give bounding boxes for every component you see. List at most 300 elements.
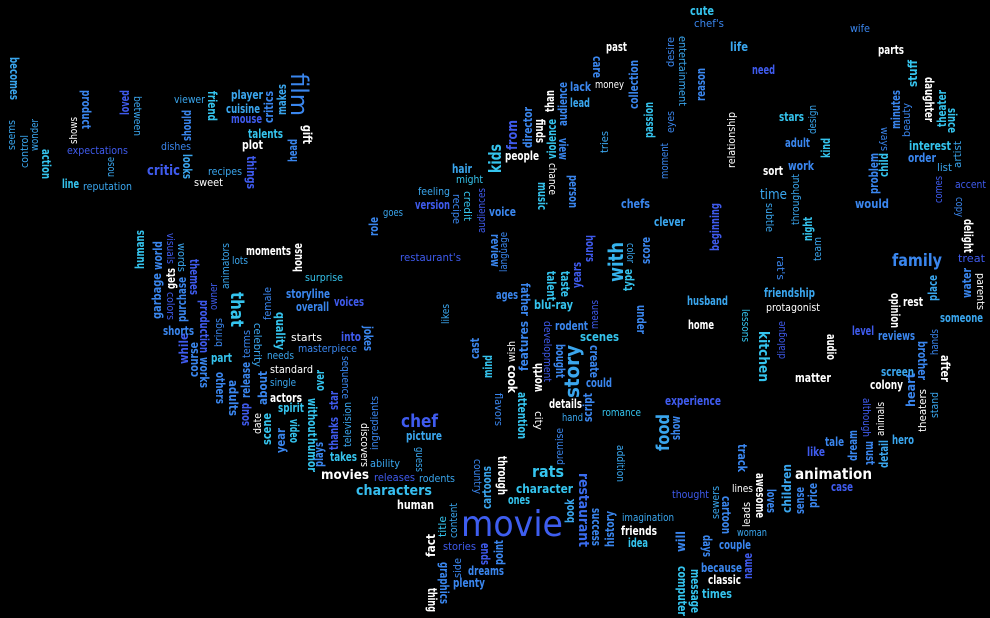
word cluster: top center: violence <box>545 119 559 159</box>
word cluster: top center: cute <box>690 4 714 18</box>
word cluster: left lower wing: standard <box>270 364 313 376</box>
word cluster: center: scenes <box>580 330 619 344</box>
word: movies: movies <box>321 468 369 483</box>
word cluster: bottom center: stories <box>443 541 476 553</box>
word cluster: upper left: between <box>131 96 143 136</box>
word: story: story <box>560 345 584 398</box>
word cluster: lower right: colony <box>870 378 903 392</box>
word cluster: lower right: animals <box>875 402 887 436</box>
word cluster: center: hours <box>583 235 597 262</box>
word cluster: lower right: parents <box>974 273 986 310</box>
word cluster: left lower wing: actors <box>270 391 302 405</box>
word cluster: top center: director <box>521 107 535 148</box>
word cluster: bottom center: guess <box>413 447 425 472</box>
word cluster: left lower wing: discovers <box>358 423 370 467</box>
word cluster: upper right: interest <box>909 139 951 153</box>
word cluster: left lower wing: over <box>313 370 327 391</box>
word cluster: left lower wing: year <box>274 428 288 453</box>
word cluster: upper right: comes <box>933 176 945 203</box>
word cluster: upper right: list <box>937 162 952 174</box>
word cluster: lower right: classic <box>708 573 741 587</box>
word cluster: upper left: critic <box>147 163 180 179</box>
word cluster: lower right: protagonist <box>766 302 820 314</box>
word cluster: bottom center: romance <box>602 407 641 419</box>
word cluster: left lower wing: quality <box>273 312 287 350</box>
word cluster: left lower wing: while <box>177 333 191 364</box>
word cluster: top center: beginning <box>708 203 722 251</box>
word cluster: upper right: minutes <box>889 90 903 129</box>
word cluster: top center: passion <box>642 102 656 138</box>
word cluster: center: color <box>624 243 636 264</box>
word cluster: left lower wing: adults <box>226 380 240 416</box>
word cluster: lower right: because <box>701 561 742 575</box>
word cluster: center: review <box>488 234 502 267</box>
word cluster: center: bought <box>553 344 567 378</box>
word cluster: center: wish <box>506 341 518 362</box>
word cluster: top center: voice <box>489 205 516 219</box>
word cluster: upper left: plot <box>242 138 263 152</box>
word cluster: bottom center: premise <box>554 428 566 465</box>
word cluster: center: years <box>570 262 584 288</box>
word cluster: bottom center: rats <box>532 462 564 481</box>
word cluster: upper left: looks <box>180 154 194 179</box>
word cluster: lower right: detail <box>877 440 891 468</box>
word cluster: left lower wing: voices <box>334 295 364 309</box>
word cluster: upper right: theater <box>935 90 949 127</box>
word cluster: top center: might <box>456 174 483 186</box>
word cluster: left lower wing: owner <box>208 282 220 310</box>
word cluster: top center: desire <box>665 37 677 67</box>
word cluster: lower right: rest <box>903 295 923 309</box>
word cluster: lower right: tale <box>825 435 844 449</box>
word cluster: left lower wing: overall <box>296 300 329 314</box>
word cluster: lower right: leads <box>741 502 753 527</box>
word cluster: bottom center: point <box>492 540 506 565</box>
word cluster: top center <box>367 4 783 251</box>
word: with: with <box>604 242 628 282</box>
word cluster: left lower wing: celebrity <box>251 323 263 367</box>
word cluster: lower right: show <box>669 416 683 440</box>
word cluster: lower right: lessons <box>739 309 751 342</box>
word cluster: top center: chef's <box>694 18 724 30</box>
word cluster: bottom center: releases <box>374 472 415 484</box>
word cluster: upper left: cuisine <box>226 102 260 116</box>
word cluster: upper right: beauty <box>901 103 913 137</box>
word cluster: upper right: copy <box>953 197 965 217</box>
word cluster: top center: people <box>505 149 539 163</box>
word cluster: center: language <box>498 232 510 272</box>
word cluster: top center: collection <box>627 60 641 109</box>
word cluster: upper left: gift <box>300 125 314 144</box>
word cluster: upper left: head <box>286 139 300 162</box>
word cluster: left lower wing: garbage <box>150 273 164 319</box>
word cluster: top center: chefs <box>621 197 650 211</box>
word cluster: left lower wing: scene <box>260 413 274 445</box>
word cluster: top center: finds <box>533 119 547 143</box>
word cluster: upper left: seems <box>6 120 18 150</box>
word cluster: left lower wing: course <box>187 342 201 377</box>
word cluster: top center: from <box>505 120 521 150</box>
word cluster: lower right: imagination <box>622 512 674 524</box>
word cluster: lower right: times <box>702 587 732 601</box>
word cluster: top center: lead <box>570 96 590 110</box>
word cluster: lower right: screen <box>881 365 914 379</box>
word cluster: upper right: team <box>812 237 824 261</box>
word cluster: left lower wing: date <box>252 413 264 434</box>
word cluster: top center: relationship <box>726 112 738 168</box>
word cluster: bottom center: rodents <box>419 473 455 485</box>
word cluster: upper right: design <box>807 105 819 134</box>
word: movie: movie <box>461 504 563 545</box>
word cluster: left lower wing: without <box>305 398 319 437</box>
word cluster: upper right: order <box>908 151 936 165</box>
word cluster: bottom center: fact <box>424 534 438 557</box>
word cluster: top center: than <box>543 90 557 112</box>
word cluster: lower right: cartoon <box>719 496 733 534</box>
word cluster: bottom center: title <box>437 516 449 537</box>
word: that: that <box>226 292 247 327</box>
word cluster: lower right: will <box>674 531 688 552</box>
word cluster: bottom center: history <box>603 511 617 547</box>
word cluster: upper left: makes <box>275 84 289 115</box>
word cluster: left lower wing: lots <box>232 255 248 267</box>
word cluster: left lower wing: sequence <box>339 356 351 399</box>
word cluster: bottom center: dreams <box>468 564 504 578</box>
word cluster: top center: moment <box>659 143 671 179</box>
word cluster: lower right: matter <box>795 371 831 385</box>
word cluster: top center: care <box>590 56 604 78</box>
word cluster: left lower wing: female <box>262 287 274 320</box>
word cluster: upper right <box>760 23 986 280</box>
word cluster: upper right: since <box>945 108 959 133</box>
word: animation: animation <box>795 465 872 483</box>
word cluster: center: cook <box>505 365 519 394</box>
word cluster: upper right: work <box>788 159 815 173</box>
word cluster: center: under <box>634 305 648 334</box>
word cluster: center: cast <box>468 338 482 359</box>
word cluster: lower right: thought <box>672 489 709 501</box>
word cluster: upper right: ways <box>878 127 890 151</box>
word cluster: lower right: addition <box>614 445 626 482</box>
word cluster: lower right: price <box>806 483 820 508</box>
word cluster: top center: lack <box>570 80 592 94</box>
word cluster: lower right: like <box>807 445 825 459</box>
word cluster: center: likes <box>440 304 452 324</box>
word cluster: lower right: sewers <box>710 486 722 519</box>
word cluster: upper right: throughout <box>790 174 802 225</box>
word cluster: lower right: level <box>852 324 874 338</box>
word cluster: upper right: parts <box>878 43 904 57</box>
word cluster: bottom center: picture <box>406 429 442 443</box>
word cluster: top center: kids <box>486 144 506 173</box>
word cluster: upper right: would <box>855 197 889 211</box>
word cluster: center: features <box>517 321 531 371</box>
word cluster: top center: sort <box>763 164 783 178</box>
word cluster: upper left: friend <box>205 91 219 121</box>
word cluster: upper right: stuff <box>906 60 920 87</box>
word cluster: top center: feeling <box>418 186 450 198</box>
word cluster: center: development <box>541 321 553 382</box>
word cluster: left lower wing: jokes <box>361 325 375 351</box>
word cluster: left lower wing: plays <box>312 442 326 467</box>
word cluster: center: father <box>518 283 532 316</box>
word cluster: top center: past <box>606 40 627 54</box>
word cluster: upper right: accent <box>955 179 986 191</box>
word cluster: center: means <box>589 300 601 329</box>
word cluster: top center: hair <box>452 162 472 176</box>
word cluster: top center: audience <box>556 82 570 126</box>
word cluster: left lower wing: television <box>342 402 354 447</box>
word cluster: left lower wing: about <box>256 371 270 405</box>
word cluster: top center: eyes <box>665 111 677 133</box>
word cluster: top center: goes <box>383 207 403 219</box>
word cluster: upper left: loved <box>118 90 132 115</box>
word cluster: top center: audiences <box>476 188 488 233</box>
word cluster: lower right: brother <box>915 341 929 380</box>
word cluster: lower right: friendship <box>764 286 815 300</box>
word cluster: lower right: home <box>688 318 714 332</box>
word: family: family <box>892 251 942 271</box>
word cluster: upper left: dishes <box>161 141 191 153</box>
word cluster: left lower wing: humans <box>133 230 147 269</box>
word cluster: left lower wing: ingredients <box>369 396 381 450</box>
word cluster: left lower wing: moments <box>246 244 291 258</box>
word cluster: bottom center: flavors <box>492 393 504 426</box>
word cluster: top center: reason <box>694 68 708 101</box>
word cluster: lower right: treat <box>958 253 985 265</box>
word cluster: upper left: line <box>62 177 79 191</box>
word cluster: upper right: night <box>801 217 815 241</box>
word cluster: lower right: hands <box>929 329 941 355</box>
word cluster: center: create <box>587 345 601 378</box>
word cluster: left lower wing: brings <box>213 318 225 347</box>
word cluster: top center: chance <box>546 163 558 195</box>
word cluster: bottom center: details <box>549 397 582 411</box>
word cluster: center: restaurant's <box>400 252 461 264</box>
word cluster: lower right: opinion <box>888 293 902 328</box>
word cluster: lower right: days <box>700 535 714 557</box>
word cluster: lower right: theaters <box>917 389 929 432</box>
word cluster: center: rodent <box>555 319 588 333</box>
word cluster: bottom center: content <box>448 503 460 538</box>
word cluster: top center: entertainment <box>676 36 688 106</box>
word cluster: left lower wing: needs <box>267 350 294 362</box>
word cluster: left lower wing: house <box>291 243 305 272</box>
word cluster: upper left: talents <box>248 127 283 141</box>
word cluster: top center: clever <box>654 215 685 229</box>
word cluster: top center: music <box>535 182 549 210</box>
word cluster: left lower wing: production <box>197 300 211 353</box>
word cluster: lower right: audio <box>824 334 838 360</box>
word cluster: left lower wing: single <box>270 377 296 389</box>
word cluster: center: type <box>621 269 635 291</box>
word cluster: upper left: wonder <box>29 118 41 151</box>
word cluster: left lower wing: spirit <box>278 401 304 415</box>
word cluster: upper left <box>6 57 314 193</box>
word cluster: lower right: loves <box>764 489 778 513</box>
word cluster: upper left: reputation <box>83 181 132 193</box>
word cluster: center: blu-ray <box>534 298 573 312</box>
word cluster: lower right: friends <box>621 524 657 538</box>
word cluster: left lower wing: starts <box>291 332 322 344</box>
word cluster: bottom center: side <box>452 558 464 578</box>
word cluster: left lower wing: video <box>287 419 301 443</box>
word cluster: upper right: daughter <box>922 77 936 122</box>
word cluster: left lower wing: soup <box>238 403 252 426</box>
word cluster: left lower wing: visuals <box>164 233 176 264</box>
word cluster: bottom center: ones <box>508 493 530 507</box>
word cluster: bottom center: book <box>563 498 577 523</box>
word cluster: lower right: stand <box>929 392 941 418</box>
word cluster: bottom center: through <box>495 456 509 495</box>
word cluster: lower right: dialogue <box>776 321 788 359</box>
word cluster: upper right: wife <box>850 23 870 35</box>
word cluster: bottom center: script <box>581 393 595 422</box>
word cluster: left lower wing: humor <box>305 438 319 472</box>
word cluster: bottom center: hand <box>562 412 583 424</box>
word cluster: bottom center: ability <box>370 458 400 470</box>
word cluster: upper left: shows <box>68 117 80 144</box>
word cluster: top center: recipe <box>450 194 462 224</box>
word cluster: lower right: awesome <box>753 473 767 518</box>
word cluster: bottom center: attention <box>515 392 529 439</box>
word cluster: upper right: stars <box>779 110 804 124</box>
word cluster: top center: person <box>566 175 580 208</box>
word cluster: upper right: subtle <box>763 203 775 232</box>
word cluster: center: could <box>586 376 612 390</box>
word cluster: upper left: critics <box>262 91 276 123</box>
word cluster: upper left: becomes <box>7 57 21 100</box>
word cluster: left lower wing: themes <box>187 259 201 295</box>
word cluster: bottom center: cartoons <box>480 466 494 509</box>
word cluster: upper right: time <box>760 187 787 203</box>
word cluster: lower right: woman <box>737 527 767 539</box>
word cluster: lower right: although <box>860 398 872 437</box>
word cluster: left lower wing: purchase <box>175 277 189 322</box>
word cluster: lower right: husband <box>687 294 728 308</box>
word cluster: left lower wing: colors <box>164 292 176 320</box>
word cluster: top center: version <box>415 198 450 212</box>
word cluster: bottom center: city <box>532 411 544 430</box>
word cluster: left lower wing <box>133 230 381 472</box>
word: restaurant: restaurant <box>575 473 591 547</box>
word cluster: left lower wing: star <box>327 391 341 410</box>
word cluster: top center: tries <box>599 131 611 153</box>
word cluster: left lower wing: masterpiece <box>298 343 357 355</box>
word cluster: left lower wing: others <box>213 372 227 404</box>
word cluster: lower right: must <box>863 441 877 465</box>
word cluster: left lower wing: gets <box>164 268 178 289</box>
word cluster: lower right: lines <box>732 483 753 495</box>
word cluster: bottom center: country <box>471 459 483 494</box>
word cluster: lower right: place <box>926 275 940 301</box>
word cluster: upper left: mouse <box>231 112 262 126</box>
word cluster: left lower wing: surprise <box>305 272 343 284</box>
word cluster: bottom center: human <box>397 498 434 512</box>
word cluster: center: score <box>639 237 653 264</box>
word cluster: lower right: heart <box>904 373 918 407</box>
word: food: food <box>653 414 674 451</box>
word: characters: characters <box>356 483 432 499</box>
word cluster: top center: need <box>752 63 775 77</box>
word cluster: left lower wing: release <box>239 362 253 398</box>
word cluster: bottom center: plenty <box>453 576 485 590</box>
word cluster: lower right: couple <box>719 538 751 552</box>
word cluster: upper right: adult <box>785 136 810 150</box>
word cluster: lower right: track <box>735 444 749 473</box>
word cluster: left lower wing: takes <box>330 450 357 464</box>
word cluster: lower right: reviews <box>878 329 915 343</box>
word cluster: center: mind <box>481 355 495 378</box>
word cluster: upper left: should <box>180 110 194 141</box>
word cluster: center: worth <box>531 363 545 392</box>
word cluster: lower right: case <box>831 480 853 494</box>
word cluster: lower right: water <box>960 268 974 298</box>
word cluster: upper left: nose <box>105 157 117 177</box>
word cluster: left lower wing: world <box>151 241 165 270</box>
word cluster: center: talent <box>544 271 558 301</box>
word cluster: center <box>400 232 653 394</box>
word cluster: lower right: hero <box>892 433 914 447</box>
word cluster: upper right: artist <box>952 141 964 168</box>
word cluster: lower right: dream <box>846 430 860 461</box>
word cluster: lower right: after <box>938 355 952 382</box>
word cluster: bottom center: success <box>589 508 603 546</box>
word cluster: lower right: sense <box>793 487 807 514</box>
word cluster: upper right: child <box>877 153 891 177</box>
word cluster: top center: role <box>367 217 381 236</box>
word: kitchen: kitchen <box>755 331 771 382</box>
word cluster: upper right: rat's <box>774 256 786 280</box>
word cluster: top center: money <box>595 79 624 91</box>
word cluster: left lower wing: works <box>197 357 211 388</box>
word cluster: left lower wing: words <box>175 243 187 272</box>
word cluster: left lower wing: part <box>211 351 232 365</box>
word cluster: upper right: kind <box>819 138 833 158</box>
word cluster: upper right: problem <box>867 153 881 194</box>
word cluster: lower right: idea <box>628 536 648 550</box>
word cluster: bottom center: character <box>516 482 573 496</box>
word cluster: upper left: viewer <box>174 94 206 106</box>
word cluster: upper left: expectations <box>67 145 128 157</box>
word cluster: left lower wing: terms <box>241 330 253 358</box>
word cluster: upper left: recipes <box>208 166 242 178</box>
word cluster: upper left: things <box>244 156 258 189</box>
word cluster: lower right: experience <box>665 394 721 408</box>
word cluster: lower right <box>614 219 986 616</box>
word cluster: upper left: sweet <box>194 177 223 189</box>
word cluster: bottom center: ends <box>478 543 492 565</box>
word cluster: top center: life <box>730 40 748 54</box>
word cluster: center: ages <box>496 288 518 302</box>
word cluster: bottom center <box>370 392 641 612</box>
word: chef: chef <box>401 411 438 432</box>
word cluster: upper left: product <box>79 90 93 129</box>
word cluster: lower right: delight <box>961 219 975 253</box>
word cluster: top center: credit <box>461 191 473 221</box>
word cluster: upper left: action <box>39 149 53 179</box>
word cluster: left lower wing: into <box>341 330 361 344</box>
word: film: film <box>285 73 313 116</box>
word cluster: left lower wing: thanks <box>327 417 341 450</box>
word cluster: lower right: children <box>780 464 794 513</box>
word cluster: left lower wing: animators <box>220 243 232 289</box>
word cluster: upper left: control <box>19 135 31 168</box>
word cluster: left lower wing: shorts <box>163 324 194 338</box>
word cluster: center: taste <box>558 271 572 297</box>
word cluster: top center: view <box>556 138 570 160</box>
word cluster: lower right: name <box>741 553 755 579</box>
